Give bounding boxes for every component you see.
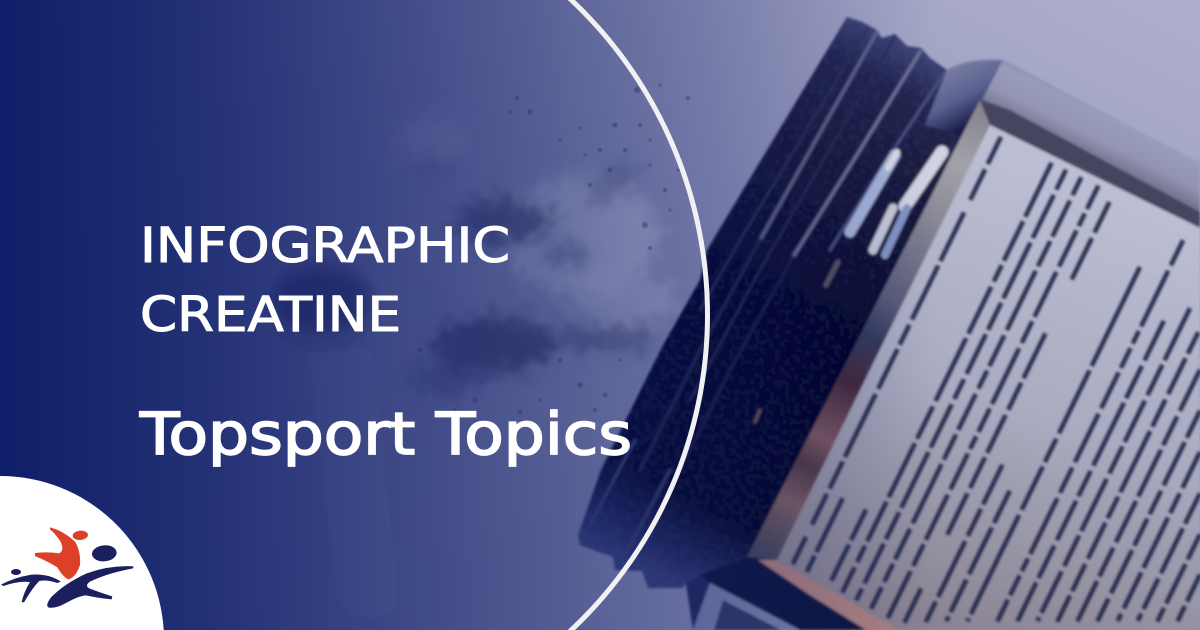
red head	[72, 530, 88, 541]
heading: infographic: INFOGRAPHIC	[140, 218, 510, 274]
label top shadow	[982, 100, 1200, 228]
small head	[11, 569, 21, 575]
base box inner	[714, 600, 781, 630]
blurred label text	[793, 137, 1200, 623]
measuring scoop	[266, 257, 398, 618]
creatine jar	[570, 10, 1200, 630]
dark strip under label	[700, 557, 900, 630]
jar body lower	[686, 520, 866, 630]
label panel	[777, 125, 1200, 630]
navy leaping figure	[47, 566, 134, 608]
subtitle: topsport topics: Topsport Topics	[139, 400, 632, 468]
navy head	[91, 544, 117, 562]
thread highlights	[590, 28, 945, 555]
small figure	[1, 574, 61, 602]
jar shoulder curve	[925, 60, 1003, 135]
logo: topsport figures	[1, 527, 134, 608]
creatine powder	[395, 84, 690, 414]
logo corner panel	[0, 476, 164, 630]
heading: creatine: CREATINE	[140, 287, 401, 343]
lid speckle texture	[614, 21, 954, 562]
jar lid and threads	[578, 17, 990, 588]
pink reflection	[758, 560, 900, 630]
base box	[693, 583, 800, 630]
label frame	[747, 100, 990, 560]
circle outline	[568, 0, 710, 630]
red figure	[35, 527, 80, 579]
jar shoulder band	[982, 60, 1200, 216]
